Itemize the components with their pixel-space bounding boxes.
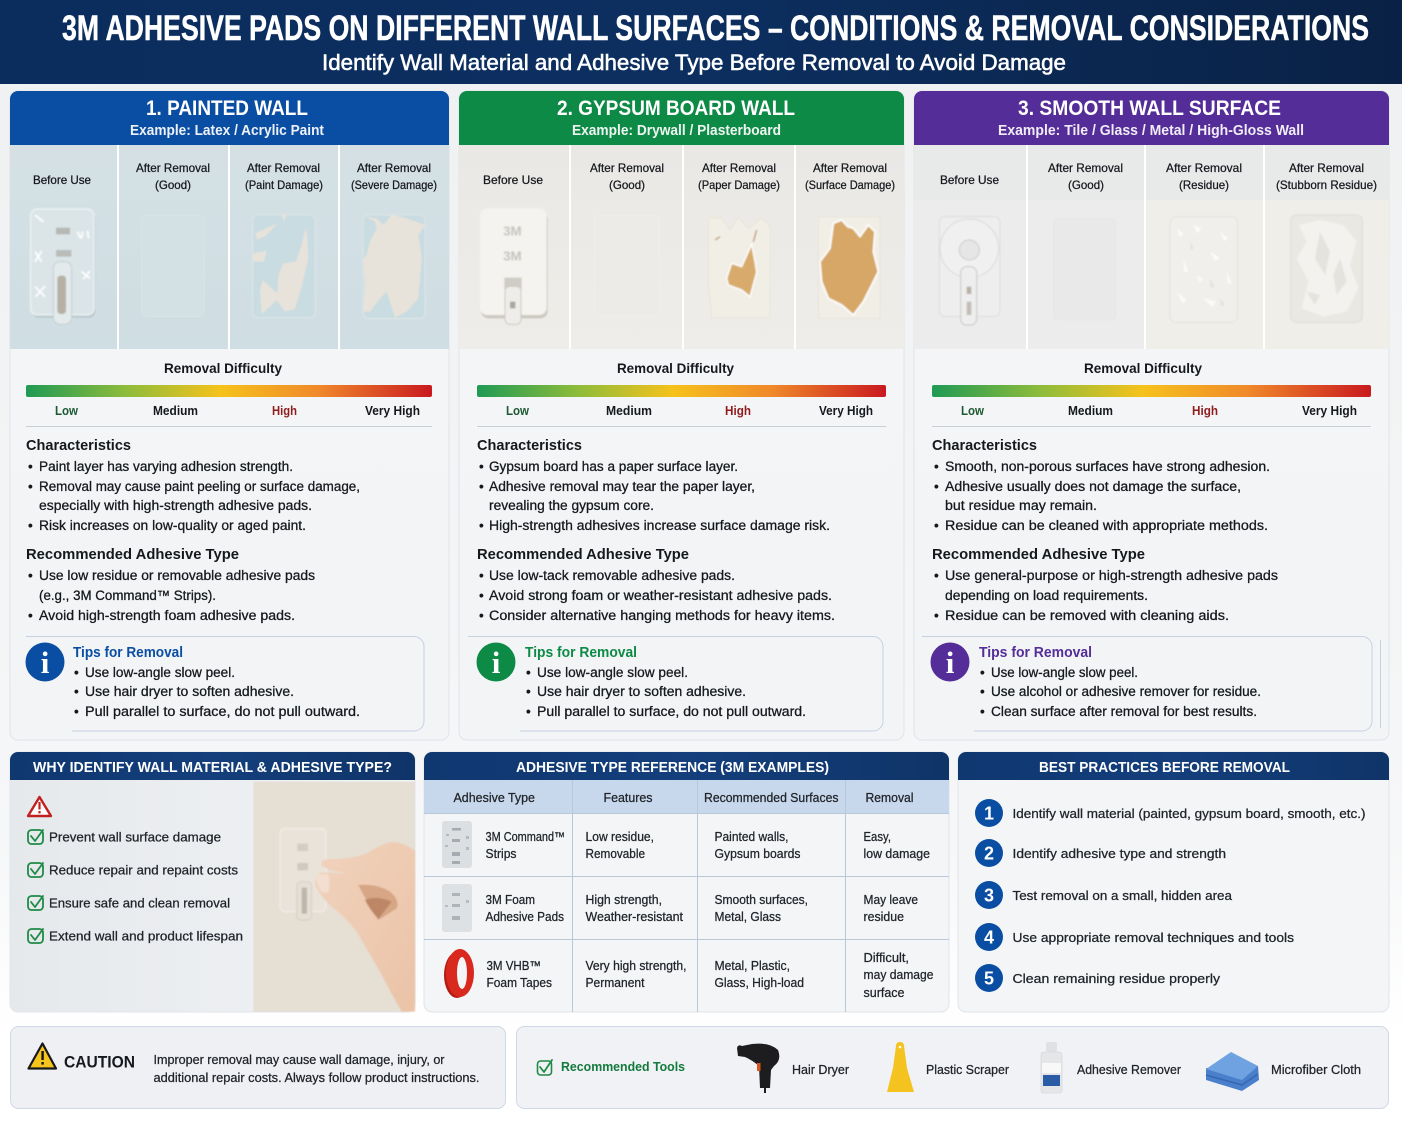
callout: tips for removal: • [980, 704, 985, 719]
characteristics text: but residue may remain. [945, 498, 1097, 513]
recommended adhesive text: depending on load requirements. [945, 588, 1148, 603]
table row: 3M Foam Adhesive Pads: High strength, [586, 893, 662, 907]
removal difficulty scale [477, 360, 886, 427]
photo strip: gypsum wall conditions: After Removal [590, 161, 664, 175]
removal difficulty scale: Low [55, 404, 78, 418]
recommended adhesive text: Recommended Adhesive Type [26, 546, 239, 563]
photo strip: gypsum wall conditions: (Paper Damage) [698, 178, 780, 192]
panel header: smooth wall surface [914, 91, 1389, 145]
removal difficulty scale: Removal Difficulty [1084, 360, 1202, 376]
table row: 3M Foam Adhesive Pads: Metal, Glass [714, 910, 781, 924]
panel: why identify [10, 752, 415, 1012]
table row: 3M Foam Adhesive Pads: 3M Foam [486, 893, 535, 907]
table row: 3M Command Strips: Low residue, [586, 830, 654, 844]
table row: 3M Foam Adhesive Pads: Smooth surfaces, [714, 893, 808, 907]
characteristics text: • [934, 479, 939, 494]
callout: tips for removal: • [74, 665, 79, 680]
panel header: painted wall: Example: Latex / Acrylic Paint [130, 123, 324, 139]
characteristics text: Gypsum board has a paper surface layer. [489, 459, 738, 474]
recommended adhesive text: • [934, 608, 939, 623]
callout: tips for removal: Use low-angle slow peel. [537, 665, 688, 680]
icon: caution triangle [28, 1044, 56, 1068]
callout: tips for removal [922, 636, 1380, 731]
panel header: gypsum board wall [459, 91, 904, 145]
recommended adhesive text: Use low-tack removable adhesive pads. [489, 568, 735, 583]
panel header: painted wall [10, 91, 449, 145]
characteristics text [26, 437, 360, 533]
photo strip: painted wall conditions: (Paint Damage) [245, 178, 323, 192]
callout: tips for removal [468, 636, 883, 731]
tool: adhesive remover bottle [1041, 1042, 1181, 1093]
header banner [0, 0, 1402, 84]
photo strip: smooth wall conditions: (Residue) [1179, 178, 1229, 192]
photo strip: smooth wall conditions: After Removal [1289, 161, 1364, 175]
table row: 3M VHB Foam Tapes: Permanent [586, 976, 645, 990]
characteristics text: • [28, 479, 33, 494]
characteristics text: Paint layer has varying adhesion strength. [39, 459, 293, 474]
step 2: Identify adhesive type and strength [1012, 847, 1226, 861]
caution text [154, 1053, 480, 1085]
callout: tips for removal: Tips for Removal [73, 645, 183, 661]
table row: 3M Foam Adhesive Pads: Weather-resistant [586, 910, 684, 924]
table row: 3M VHB Foam Tapes: Glass, High-load [714, 976, 804, 990]
recommended adhesive text: Avoid strong foam or weather-resistant adhesive pads. [489, 588, 832, 603]
photo strip: painted wall conditions: (Severe Damage) [351, 178, 437, 192]
table row: 3M VHB Foam Tapes: Metal, Plastic, [714, 959, 790, 973]
tool: hair dryer [737, 1044, 849, 1093]
recommended adhesive text: (e.g., 3M Command™ Strips). [39, 588, 216, 603]
icon: white foam pad with hook: 3M [503, 249, 522, 264]
table row: 3M Command Strips: low damage [864, 847, 930, 861]
characteristics text: High-strength adhesives increase surface damage risk. [489, 518, 830, 533]
icon: white foam pad with hook: 3M [503, 224, 522, 239]
photo strip: smooth wall conditions: (Good) [1068, 178, 1104, 192]
photo strip: gypsum wall conditions: (Surface Damage) [805, 178, 895, 192]
photo: hand peeling adhesive pad [253, 782, 415, 1012]
icon: red VHB tape roll [444, 949, 474, 998]
tool: microfiber cloth [1206, 1052, 1361, 1091]
removal difficulty scale: Medium [606, 404, 652, 418]
icon: clean outline after removal [142, 215, 204, 317]
characteristics text [477, 437, 830, 533]
panel: best practices [958, 752, 1389, 1012]
tool: microfiber cloth: Microfiber Cloth [1271, 1063, 1361, 1077]
recommended adhesive text [477, 546, 835, 623]
panel heading: why identify: WHY IDENTIFY WALL MATERIAL & ADHESIVE TYPE? [33, 760, 392, 776]
step 2 [975, 839, 1226, 867]
photo strip: smooth wall conditions: Before Use [940, 173, 999, 187]
tool: plastic scraper [887, 1042, 1009, 1092]
table row: 3M VHB Foam Tapes: may damage [864, 968, 934, 982]
photo strip: gypsum wall conditions: After Removal [702, 161, 776, 175]
callout: tips for removal: • [74, 684, 79, 699]
callout: tips for removal: Pull parallel to surface, do not pull outward. [85, 704, 360, 719]
panel: gypsum board wall [459, 91, 904, 740]
callout: tips for removal: i [946, 645, 955, 680]
callout: tips for removal: Use hair dryer to soften adhesive. [537, 684, 746, 699]
characteristics text: • [479, 479, 484, 494]
caution label: CAUTION [64, 1052, 135, 1072]
tool: plastic scraper: Plastic Scraper [926, 1063, 1009, 1077]
panel header: gypsum board wall: Example: Drywall / Plasterboard [572, 123, 781, 139]
icon: clear adhesive pad with hook [31, 209, 95, 324]
characteristics text: Adhesive removal may tear the paper layer, [489, 479, 755, 494]
removal difficulty scale [932, 360, 1371, 427]
icon: command strip [442, 821, 472, 868]
icon: clear suction hook [939, 217, 1000, 325]
callout: tips for removal: Use hair dryer to soften adhesive. [85, 684, 294, 699]
characteristics text: Residue can be cleaned with appropriate methods. [945, 518, 1268, 533]
recommended adhesive text: • [934, 568, 939, 583]
icon: foam pad [442, 884, 472, 932]
photo strip: gypsum wall conditions: After Removal [813, 161, 887, 175]
characteristics text: Characteristics [26, 437, 131, 454]
characteristics text: • [28, 459, 33, 474]
table row: 3M Command Strips: Painted walls, [714, 830, 788, 844]
removal difficulty scale: Low [506, 404, 529, 418]
recommended adhesive text: Residue can be removed with cleaning aids. [945, 608, 1229, 623]
photo strip: smooth wall conditions: After Removal [1048, 161, 1123, 175]
icon: surface damage [818, 217, 880, 318]
tool: hair dryer: Hair Dryer [792, 1063, 849, 1077]
icon: clean outline after removal [594, 216, 659, 316]
characteristics text: • [28, 518, 33, 533]
characteristics text: • [479, 518, 484, 533]
characteristics text: revealing the gypsum core. [489, 498, 654, 513]
recommended adhesive text: Consider alternative hanging methods for heavy items. [489, 608, 835, 623]
recommended adhesive text: Use low residue or removable adhesive pads [39, 568, 315, 583]
recommended adhesive text: Recommended Adhesive Type [932, 546, 1145, 563]
step 1: Identify wall material (painted, gypsum board, smooth, etc.) [1012, 807, 1366, 821]
step 4 [975, 923, 1294, 951]
panel header: smooth wall surface: 3. SMOOTH WALL SURFACE [1018, 96, 1281, 120]
benefits checklist: Prevent wall surface damage [49, 830, 221, 844]
characteristics text: Risk increases on low-quality or aged paint. [39, 518, 306, 533]
callout: tips for removal: • [980, 684, 985, 699]
table row: 3M Command Strips: Strips [486, 847, 516, 861]
panel header: painted wall: 1. PAINTED WALL [146, 96, 308, 120]
recommended adhesive text: • [28, 608, 33, 623]
recommended adhesive text: • [479, 608, 484, 623]
subtitle: Identify Wall Material and Adhesive Type Before Removal to Avoid Damage [322, 50, 1066, 75]
table row: 3M Command Strips [442, 821, 930, 868]
callout: tips for removal: Use alcohol or adhesive remover for residue. [991, 684, 1261, 699]
icon: clean outline after removal [1053, 218, 1116, 320]
characteristics text: • [934, 459, 939, 474]
photo strip: painted wall conditions: Before Use [33, 173, 91, 187]
callout: tips for removal [26, 636, 424, 731]
photo strip: painted wall conditions: After Removal [247, 161, 320, 175]
recommended adhesive text: Use general-purpose or high-strength adhesive pads [945, 568, 1278, 583]
panel header: gypsum board wall: 2. GYPSUM BOARD WALL [557, 96, 795, 120]
recommended adhesive text: • [479, 588, 484, 603]
step 5 [975, 964, 1221, 992]
table column headers: Recommended Surfaces [704, 791, 838, 805]
step 5: Clean remaining residue properly [1012, 972, 1221, 986]
icon: paper damage [708, 218, 770, 318]
photo strip: smooth wall conditions [914, 145, 1389, 349]
benefits checklist: Ensure safe and clean removal [49, 896, 230, 910]
removal difficulty scale: Medium [153, 404, 198, 418]
photo strip: gypsum wall conditions [459, 145, 904, 349]
callout: tips for removal: Use low-angle slow peel. [991, 665, 1138, 680]
panel heading: best practices: BEST PRACTICES BEFORE REMOVAL [1039, 760, 1290, 776]
step 4: Use appropriate removal techniques and tools [1012, 931, 1294, 945]
step 1: 1 [984, 804, 994, 824]
characteristics text: Smooth, non-porous surfaces have strong adhesion. [945, 459, 1270, 474]
callout: tips for removal: • [526, 704, 531, 719]
step 5: 5 [984, 968, 994, 988]
removal difficulty scale: High [725, 404, 751, 418]
removal difficulty scale: High [272, 404, 297, 418]
photo strip: gypsum wall conditions: (Good) [609, 178, 645, 192]
table row: 3M Command Strips: 3M Command™ [486, 830, 565, 844]
recommended adhesive text [932, 546, 1278, 623]
panel heading: adhesive reference [424, 752, 949, 780]
characteristics text: • [479, 459, 484, 474]
recommended adhesive text: • [479, 568, 484, 583]
characteristics text: Characteristics [932, 437, 1037, 454]
step 3: 3 [984, 886, 994, 906]
callout: tips for removal: • [526, 665, 531, 680]
characteristics text: Adhesive usually does not damage the surface, [945, 479, 1241, 494]
photo strip: painted wall conditions: After Removal [136, 161, 210, 175]
table row: 3M Foam Adhesive Pads: residue [864, 910, 904, 924]
callout: tips for removal: • [526, 684, 531, 699]
benefits checklist: Extend wall and product lifespan [49, 930, 243, 944]
table row: 3M Foam Adhesive Pads [442, 884, 918, 932]
panel heading: best practices [958, 752, 1389, 780]
removal difficulty scale [26, 360, 432, 427]
icon: paint damage [253, 214, 315, 318]
removal difficulty scale: Removal Difficulty [164, 360, 282, 376]
callout: tips for removal: i [41, 645, 50, 680]
tool: adhesive remover bottle: Adhesive Remover [1077, 1063, 1181, 1077]
removal difficulty scale: Very High [819, 404, 873, 418]
step 4: 4 [984, 928, 994, 948]
table row: 3M VHB Foam Tapes: Foam Tapes [486, 976, 552, 990]
photo strip: smooth wall conditions: (Stubborn Residue) [1276, 178, 1377, 192]
panel header: smooth wall surface: Example: Tile / Glass / Metal / High-Gloss Wall [998, 123, 1304, 139]
photo strip: smooth wall conditions: After Removal [1166, 161, 1242, 175]
removal difficulty scale: Medium [1068, 404, 1113, 418]
table column headers [424, 780, 949, 813]
panel: caution [10, 1026, 506, 1108]
step 3: Test removal on a small, hidden area [1012, 889, 1232, 903]
characteristics text: • [934, 518, 939, 533]
table row: 3M Command Strips: Gypsum boards [714, 847, 800, 861]
callout: tips for removal: i [492, 645, 501, 680]
table column headers: Removal [866, 791, 914, 805]
panel: painted wall [10, 91, 449, 740]
recommended adhesive text: • [28, 568, 33, 583]
callout: tips for removal: Tips for Removal [979, 645, 1092, 661]
icon: severe paint damage [363, 215, 425, 318]
removal difficulty scale: Low [961, 404, 984, 418]
panel heading: adhesive reference: ADHESIVE TYPE REFERENCE (3M EXAMPLES) [516, 760, 829, 776]
removal difficulty scale: Removal Difficulty [617, 360, 734, 376]
removal difficulty scale: High [1192, 404, 1218, 418]
table column headers: Adhesive Type [454, 791, 535, 805]
removal difficulty scale: Very High [365, 404, 420, 418]
callout: tips for removal: Tips for Removal [525, 645, 637, 661]
benefits checklist [28, 830, 243, 944]
recommended adhesive text [26, 546, 315, 623]
table row: 3M Command Strips: Removable [586, 847, 645, 861]
panel: smooth wall surface [914, 91, 1389, 740]
icon: stubborn residue [1291, 215, 1362, 322]
table row: 3M VHB Foam Tapes: Difficult, [864, 951, 909, 965]
caution text: Improper removal may cause wall damage, injury, or [154, 1053, 444, 1067]
callout: tips for removal: • [980, 665, 985, 680]
characteristics text: Removal may cause paint peeling or surface damage, [39, 479, 360, 494]
step 3 [975, 881, 1232, 909]
caution text: additional repair costs. Always follow product instructions. [154, 1071, 480, 1085]
callout: tips for removal: Clean surface after removal for best results. [991, 704, 1257, 719]
icon: white foam pad with hook [480, 208, 548, 324]
removal difficulty scale: Very High [1302, 404, 1357, 418]
table row: 3M VHB Foam Tapes: Very high strength, [586, 959, 686, 973]
panel: recommended tools [516, 1026, 1388, 1108]
panel: adhesive type reference table [424, 752, 949, 1012]
callout: tips for removal: Pull parallel to surface, do not pull outward. [537, 704, 806, 719]
table row: 3M Foam Adhesive Pads: Adhesive Pads [486, 910, 564, 924]
table row: 3M VHB Foam Tapes: 3M VHB™ [486, 959, 541, 973]
table row: 3M VHB Foam Tapes: surface [864, 986, 905, 1000]
photo strip: gypsum wall conditions: Before Use [483, 173, 543, 187]
icon: light residue [1170, 217, 1238, 322]
table column headers: Features [604, 791, 652, 805]
recommended adhesive text: Avoid high-strength foam adhesive pads. [39, 608, 295, 623]
icon: warning triangle [28, 797, 51, 816]
photo strip: painted wall conditions [10, 145, 449, 349]
recommended tools label: Recommended Tools [561, 1060, 685, 1074]
benefits checklist: Reduce repair and repaint costs [49, 864, 238, 878]
characteristics text: Characteristics [477, 437, 582, 454]
photo strip: painted wall conditions: (Good) [155, 178, 191, 192]
recommended adhesive text: Recommended Adhesive Type [477, 546, 689, 563]
panel heading: why identify [10, 752, 415, 780]
callout: tips for removal: Use low-angle slow peel. [85, 665, 235, 680]
photo strip: painted wall conditions: After Removal [357, 161, 431, 175]
step 2: 2 [984, 844, 994, 864]
table row: 3M Command Strips: Easy, [864, 830, 891, 844]
callout: tips for removal: • [74, 704, 79, 719]
characteristics text: especially with high-strength adhesive pads. [39, 498, 312, 513]
step 1 [975, 799, 1366, 827]
characteristics text [932, 437, 1270, 533]
table row: 3M VHB Foam Tapes [444, 949, 934, 1000]
table row: 3M Foam Adhesive Pads: May leave [864, 893, 918, 907]
